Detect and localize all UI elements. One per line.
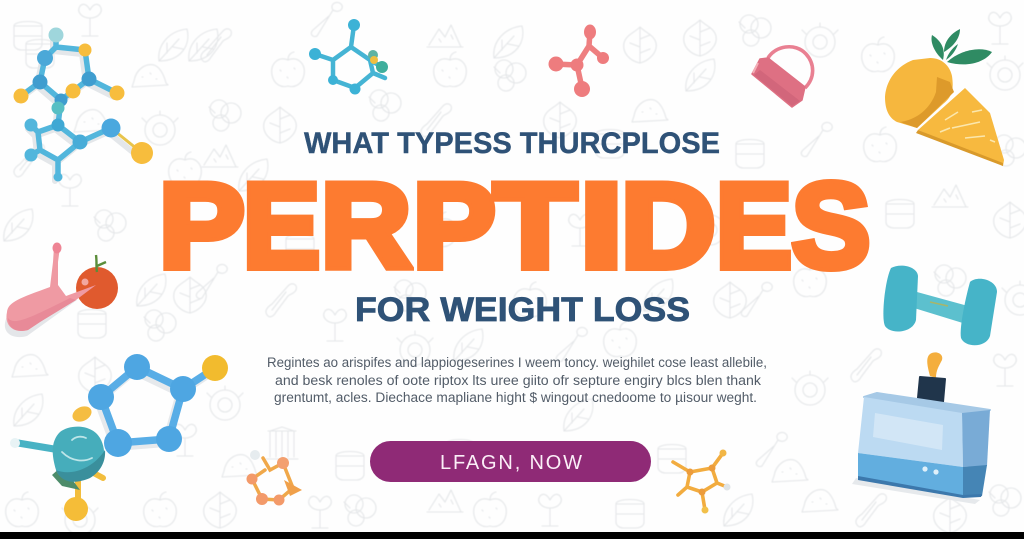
button: learn now: LFAGN, NOW [440, 452, 582, 474]
text block: description: grentumt, acles. Diechace mapliane hight $ wingout cnedoome to µisour weght. [274, 390, 757, 405]
icon: leaves [931, 29, 992, 64]
icon: blue device [852, 352, 990, 504]
icon: mango and cheese [885, 29, 1004, 166]
button: learn now [370, 441, 651, 482]
text block: description: and besk renoles of oote riptox lts uree giito ofr septure engiry blcs blen thank [275, 373, 761, 388]
title: peptides: T [494, 159, 576, 293]
icon: blue ring molecule with teal blob [10, 354, 228, 521]
title: peptides: D [621, 159, 715, 293]
heading: what types: WHAT TYPESS THURCPLOSE [304, 127, 720, 160]
title: peptides: R [321, 159, 411, 293]
bottom black bar [0, 532, 1024, 539]
icon: pink molecule top centre [548, 24, 609, 97]
icon: pink tool and tomato [5, 242, 118, 337]
title: peptides: P [413, 159, 495, 293]
subheading: for weight loss: FOR WEIGHT LOSS [355, 291, 690, 329]
icon: pink kettlebell [752, 47, 813, 107]
icon: teal dumbbell [883, 266, 997, 345]
icon: orange ring molecule [246, 450, 302, 506]
text block: description: Regintes ao arispifes and lappiogeserines I weem toncy. weighilet cose least allebile, [267, 355, 767, 370]
title: peptides: E [243, 159, 320, 293]
title: peptides: E [716, 159, 792, 293]
title: peptides: I [580, 159, 623, 293]
icon: teal molecule top centre [309, 19, 388, 94]
title: peptides: S [792, 159, 870, 293]
icon: blue molecule top left [14, 28, 153, 182]
icon: yellow-orange molecule [673, 450, 730, 514]
title: peptides: P [159, 159, 245, 293]
title: peptides [159, 159, 870, 293]
text block: description [267, 355, 767, 405]
